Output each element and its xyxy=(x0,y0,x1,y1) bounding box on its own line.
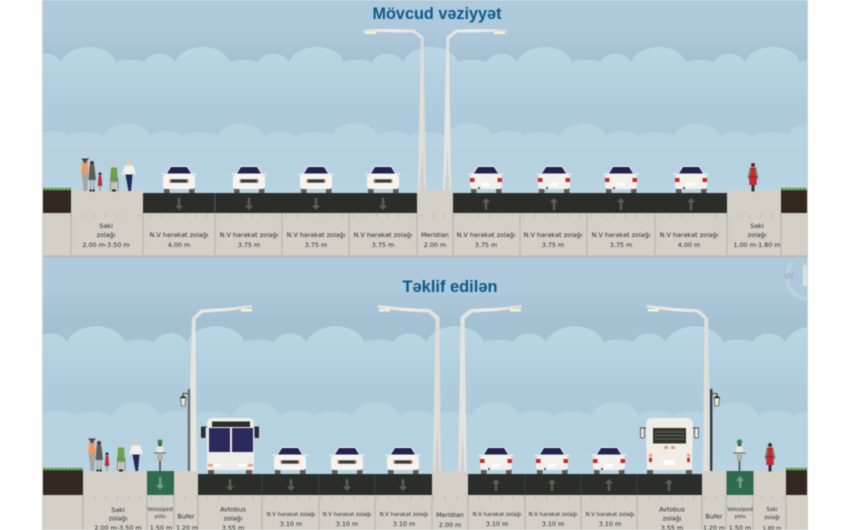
lane labels: 3.75 m xyxy=(238,241,260,249)
cars xyxy=(162,166,708,193)
lane labels: Səki xyxy=(750,222,764,230)
lane labels: 3.75 m xyxy=(475,241,497,249)
lane labels: Səki xyxy=(766,507,778,513)
lane labels: Bufer xyxy=(177,512,195,520)
cars xyxy=(272,447,626,474)
street lamps xyxy=(188,305,711,471)
ground and planting xyxy=(42,189,808,258)
lane labels: zolağı xyxy=(663,514,682,522)
title: Təklif edilən xyxy=(402,278,498,296)
lane arrows xyxy=(175,198,695,210)
bus front xyxy=(201,418,259,474)
lane labels: zolağı xyxy=(97,231,116,239)
sky xyxy=(42,257,808,530)
bike lanes xyxy=(147,471,754,495)
lane labels: N.V hərəkət zolağı xyxy=(267,511,315,518)
lane labels: zolağı xyxy=(109,514,128,522)
lane labels: 3.10 m xyxy=(599,520,621,528)
title: Mövcud vəziyyət xyxy=(372,5,502,23)
lane labels: N.V hərəkət zolağı xyxy=(524,231,583,239)
lane labels: 3.10 m xyxy=(336,520,358,528)
lane labels: 2.00 m xyxy=(424,241,446,249)
lane labels: Velosiped xyxy=(727,507,753,513)
lane labels: zolağı xyxy=(224,514,243,522)
lane labels: N.V hərəkət zolağı xyxy=(473,511,521,518)
pedestrians xyxy=(86,438,143,472)
watermark xyxy=(784,262,807,299)
pedestrian in red xyxy=(764,443,776,472)
ground and planting xyxy=(43,469,808,530)
lane labels: 3.75 m xyxy=(542,241,564,249)
clouds xyxy=(43,47,807,193)
lanterns xyxy=(180,389,720,471)
clouds xyxy=(43,326,807,474)
lane labels: 3.10 m xyxy=(393,520,415,528)
bus rear xyxy=(640,418,699,474)
lane labels: N.V hərəkət zolağı xyxy=(354,231,413,239)
lane labels: Avtobus xyxy=(659,506,685,514)
lane dividers and ticks xyxy=(83,495,786,530)
lane labels xyxy=(94,506,781,530)
lane labels xyxy=(82,222,781,249)
street lamps xyxy=(363,29,507,190)
lane labels: 3.10 m xyxy=(542,520,564,528)
lane labels: 3.10 m xyxy=(280,520,302,528)
panel: current situation xyxy=(0,0,850,258)
lane labels: Səki xyxy=(99,222,113,230)
lane labels: Velosiped xyxy=(147,507,173,513)
lane labels: 2.00 m-3.50 m xyxy=(82,241,130,249)
lane labels: N.V hərəkət zolağı xyxy=(220,231,279,239)
lane labels: zolağı xyxy=(764,514,780,521)
lane labels: N.V hərəkət zolağı xyxy=(586,511,634,518)
lane labels: N.V hərəkət zolağı xyxy=(660,231,719,239)
lane labels: 3.75 m xyxy=(610,241,632,249)
lane labels: 3.75 m xyxy=(305,241,327,249)
lane labels: yolu xyxy=(734,514,746,520)
cyclist right xyxy=(734,439,746,471)
lane labels: 1.00 m-1.80 m xyxy=(733,241,781,249)
lane labels: Avtobus xyxy=(220,506,246,514)
road xyxy=(143,193,727,213)
lane dividers and ticks xyxy=(71,213,781,255)
lane labels: 3.10 m xyxy=(486,520,508,528)
lane labels: yolu xyxy=(154,514,166,520)
watermark: W xyxy=(784,272,794,282)
lane labels: Meridian xyxy=(421,231,449,239)
lane labels: zolağı xyxy=(748,231,767,239)
road xyxy=(198,474,702,495)
lane labels: N.V hərəkət zolağı xyxy=(457,231,516,239)
lane labels: N.V hərəkət zolağı xyxy=(592,231,651,239)
sky xyxy=(42,0,808,257)
lane labels: 4.00 m xyxy=(168,241,190,249)
lane labels: 4.00 m xyxy=(678,241,700,249)
pedestrian in red xyxy=(748,163,758,192)
lane labels: Səki xyxy=(111,506,125,514)
lane labels: N.V hərəkət zolağı xyxy=(150,231,209,239)
lane arrows xyxy=(226,479,673,491)
pedestrians xyxy=(80,158,136,192)
lane labels: 3.75 m xyxy=(372,241,394,249)
lane labels: N.V hərəkət zolağı xyxy=(529,511,577,518)
lane labels: Meridian xyxy=(436,511,464,519)
lane labels: N.V hərəkət zolağı xyxy=(287,231,346,239)
lane labels: N.V hərəkət zolağı xyxy=(323,511,371,518)
panel: proposed xyxy=(0,257,850,530)
cyclist left xyxy=(154,439,166,471)
lane labels: 2.00 m xyxy=(439,521,461,529)
lane labels: N.V hərəkət zolağı xyxy=(380,511,428,518)
lane labels: Bufer xyxy=(705,512,723,520)
